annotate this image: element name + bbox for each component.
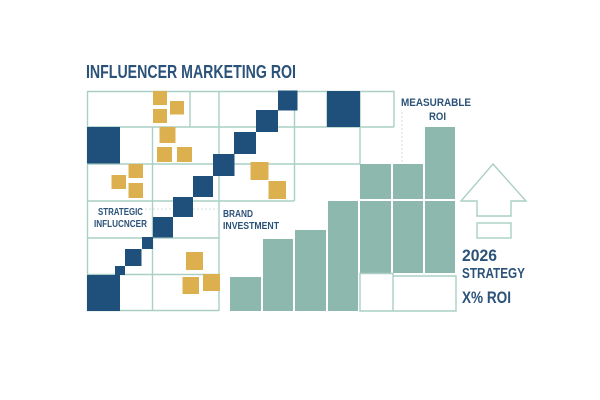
label: strategic influencer: STRATEGIC <box>98 207 143 218</box>
dashed connector lines <box>145 112 402 209</box>
bar chart: staircase of teal bars <box>230 127 455 311</box>
label: strategic influencer <box>94 207 148 230</box>
icon: up arrow with base <box>461 164 526 238</box>
callout: 2026 strategy <box>462 246 525 282</box>
label: brand investment <box>223 208 279 232</box>
label: measurable roi: ROI <box>429 111 446 123</box>
label: brand investment: INVESTMENT <box>223 220 279 232</box>
navy staircase squares <box>87 90 360 311</box>
callout: 2026 strategy: 2026 <box>462 246 497 265</box>
matrix grid <box>87 91 456 311</box>
label: measurable roi: MEASURABLE <box>401 97 471 109</box>
gold squares <box>112 91 286 294</box>
title: INFLUENCER MARKETING ROI <box>86 62 296 82</box>
label: brand investment: BRAND <box>223 208 253 220</box>
callout: x% roi: X% ROI <box>462 289 511 307</box>
label: measurable roi <box>401 97 471 123</box>
label: strategic influencer: INFLUCNCER <box>94 219 148 230</box>
callout: 2026 strategy: STRATEGY <box>462 265 525 282</box>
